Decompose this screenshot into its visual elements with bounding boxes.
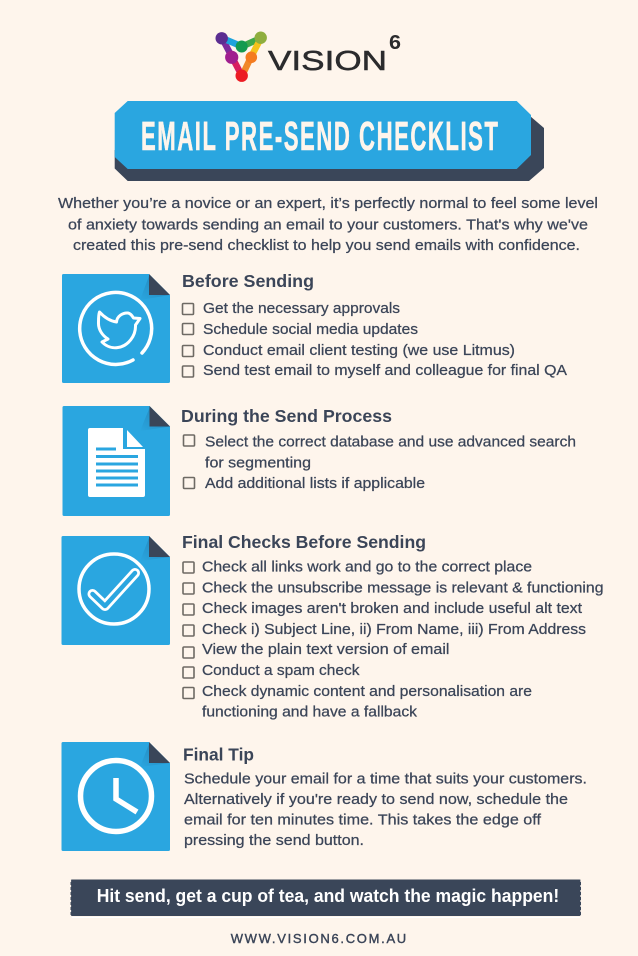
title: EMAIL PRE-SEND CHECKLIST — [141, 113, 498, 159]
logo: Vision6 — [216, 32, 401, 82]
section: final checks before sending: Check dynamic content and personalisation are — [202, 683, 532, 700]
callout bar — [70, 880, 581, 918]
intro text: Whether you’re a novice or an expert, it’s perfectly normal to feel some level — [58, 195, 598, 212]
section: final tip: Final Tip — [183, 744, 254, 764]
intro text — [58, 195, 598, 254]
section: final checks before sending: functioning and have a fallback — [202, 704, 418, 720]
section: before sending: Schedule social media updates — [203, 321, 418, 338]
icon: checkmark page — [62, 536, 170, 645]
section: final tip: pressing the send button. — [184, 832, 364, 849]
logo: Vision6: 6 — [389, 32, 401, 54]
logo: Vision6: VISION — [268, 45, 387, 76]
icon: clock page — [62, 742, 170, 851]
icon: document page — [62, 406, 170, 516]
section: final checks before sending — [182, 532, 604, 720]
section: final tip: Schedule your email for a time that suits your customers. — [184, 770, 587, 788]
section: before sending: Conduct email client testing (we use Litmus) — [203, 342, 515, 359]
callout bar: Hit send, get a cup of tea, and watch the magic happen! — [97, 885, 559, 906]
section: during the send process: Select the correct database and use advanced search — [205, 434, 576, 450]
section: final checks before sending: View the plain text version of email — [202, 641, 450, 658]
footer url: WWW.VISION6.COM.AU — [231, 931, 406, 946]
icon: twitter bird page — [62, 274, 170, 383]
section: during the send process — [181, 406, 576, 492]
section: final checks before sending: Conduct a spam check — [202, 662, 360, 679]
intro text: of anxiety towards sending an email to your customers. That's why we've — [68, 216, 588, 234]
section: during the send process: During the Send Process — [181, 406, 392, 426]
section: before sending: Send test email to myself and colleague for final QA — [203, 362, 567, 379]
section: during the send process: Add additional lists if applicable — [205, 475, 425, 492]
section: final checks before sending: Check i) Subject Line, ii) From Name, iii) From Address — [202, 621, 586, 638]
section: before sending: Before Sending — [182, 271, 314, 291]
intro text: created this pre-send checklist to help you send emails with confidence. — [73, 237, 580, 254]
section: final checks before sending: Check the unsubscribe message is relevant & functioning — [202, 580, 604, 596]
section: during the send process: for segmenting — [205, 454, 311, 472]
title banner — [115, 101, 544, 181]
section: final tip — [183, 744, 587, 849]
section: final tip: email for ten minutes time. This takes the edge off — [184, 812, 542, 828]
section: before sending — [182, 271, 567, 379]
section: final checks before sending: Final Checks Before Sending — [182, 532, 426, 552]
section: final checks before sending: Check all links work and go to the correct place — [202, 558, 532, 576]
section: final checks before sending: Check images aren't broken and include useful alt text — [202, 600, 583, 617]
section: final tip: Alternatively if you're ready to send now, schedule the — [184, 791, 568, 808]
section: before sending: Get the necessary approvals — [203, 300, 400, 317]
